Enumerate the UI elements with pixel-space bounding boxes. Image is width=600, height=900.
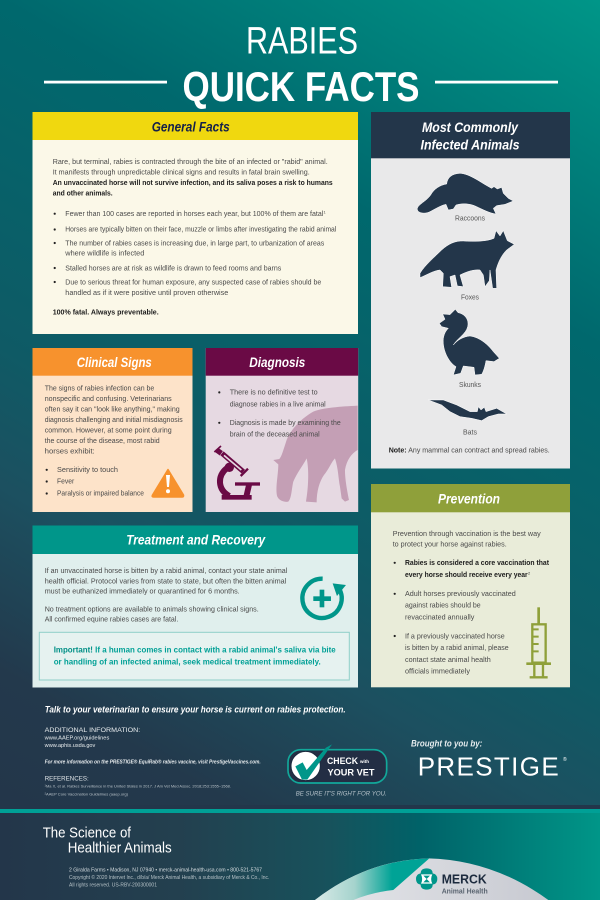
footer band bbox=[0, 805, 600, 900]
text block: additional information: ADDITIONAL INFORMATION: bbox=[45, 727, 140, 734]
list: prevention bullets: If a previously vaccinated horse bbox=[405, 631, 505, 640]
list: general facts bullets: Due to serious threat for human exposure, any suspected case of rabies should be bbox=[65, 277, 321, 286]
panel: most commonly infected animals bbox=[371, 112, 570, 468]
icon: microscope bbox=[214, 446, 260, 500]
list: general facts bullets: Stalled horses are at risk as wildlife is drawn to feed rooms and barns bbox=[65, 263, 281, 272]
label: foxes: Foxes bbox=[461, 293, 479, 302]
callout: important: Important! If a human comes in contact with a rabid animal's saliva via bite bbox=[54, 644, 336, 654]
icon: bat bbox=[428, 400, 507, 421]
list: diagnosis bullets: There is no definitive test to bbox=[230, 388, 318, 397]
list: prevention bullets: Rabies is considered a core vaccination that bbox=[405, 558, 549, 567]
icon: raccoon bbox=[417, 173, 513, 214]
list: prevention bullets: Adult horses previously vaccinated bbox=[405, 589, 516, 598]
heading: most commonly infected animals bbox=[420, 119, 520, 153]
text block: additional information bbox=[44, 727, 261, 765]
panel: diagnosis bbox=[206, 348, 358, 512]
list: clinical signs bullets: Paralysis or impaired balance bbox=[57, 489, 144, 498]
text block: tagline: 100% fatal. Always preventable. bbox=[53, 307, 159, 316]
list: general facts bullets: Horses are typically bitten on their face, muzzle or limbs after investigating the rabid animal bbox=[65, 225, 337, 234]
text block: treatment: health official. Protocol varies from state to state, but often the bitten animal bbox=[45, 576, 287, 585]
text block: clinical signs: often say it can "look like anything," making bbox=[45, 404, 180, 413]
callout: important bbox=[39, 632, 349, 680]
list: general facts bullets: where wildlife is infected bbox=[64, 249, 144, 258]
text block: references bbox=[45, 776, 231, 796]
badge: check with your vet: CHECK bbox=[327, 756, 358, 767]
list: diagnosis bullets: Diagnosis is made by examining the bbox=[230, 418, 341, 427]
list: prevention bullets: every horse should receive every year bbox=[405, 570, 528, 579]
title: QUICK FACTS bbox=[182, 63, 420, 110]
list: general facts bullets: The number of rabies cases is increasing due, in large part, to urbanization of areas bbox=[65, 238, 324, 247]
list: prevention bullets: contact state animal health bbox=[405, 655, 491, 664]
list: prevention bullets bbox=[394, 558, 549, 676]
text block: treatment bbox=[45, 566, 288, 624]
text block: general facts intro: Rare, but terminal, rabies is contracted through the bite of an infected or "rabid" animal. bbox=[53, 157, 328, 166]
text block: additional information: www.aphis.usda.gov bbox=[44, 743, 96, 749]
panel: clinical signs bbox=[32, 348, 192, 512]
text block: clinical signs bbox=[45, 384, 183, 455]
text block: company address: Copyright © 2020 Intervet Inc., d/b/a/ Merck Animal Health, a subsidiary of Merck & Co., Inc. bbox=[69, 874, 269, 881]
list: clinical signs bullets: Fever bbox=[57, 477, 75, 486]
text block: clinical signs: The signs of rabies infection can be bbox=[45, 384, 154, 393]
badge: check with your vet bbox=[288, 744, 387, 797]
text block: references: ¹Ma X, et al. Rabies Surveillance in the United States in 2017. J Am Vet Med Assoc. 2018;253:1555–1568. bbox=[45, 785, 231, 789]
text block: general facts intro: It manifests through unpredictable clinical signs and results in fatal brain swelling. bbox=[53, 168, 310, 176]
logo: merck animal health: MERCK bbox=[442, 872, 487, 887]
text: the science of healthier animals: The Science of bbox=[43, 824, 132, 841]
list: general facts bullets: Fewer than 100 cases are reported in horses each year, but 100% of them are fatal bbox=[65, 209, 324, 218]
list: general facts bullets bbox=[54, 209, 337, 297]
text block: general facts intro: An unvaccinated horse will not survive infection, and its saliva poses a risk to humans bbox=[53, 178, 333, 187]
label: bats: Bats bbox=[463, 428, 477, 437]
text block: company address: All rights reserved. US-RBV-200300001 bbox=[69, 882, 157, 888]
list: prevention bullets: against rabies should be bbox=[405, 601, 481, 610]
logo: merck animal health bbox=[305, 858, 558, 900]
list: prevention bullets: revaccinated annually bbox=[405, 613, 474, 622]
heading: diagnosis: Diagnosis bbox=[249, 354, 305, 370]
text block: clinical signs: nonspecific and confusing. Veterinarians bbox=[45, 394, 172, 403]
text block: company address: 2 Giralda Farms • Madison, NJ 07940 • merck-animal-health-usa.com • 800-521-5767 bbox=[69, 868, 262, 874]
heading: treatment and recovery: Treatment and Recovery bbox=[126, 531, 266, 547]
badge: check with your vet: with bbox=[359, 759, 369, 764]
text block: treatment: All confirmed equine rabies cases are fatal. bbox=[45, 615, 178, 624]
icon: skunk bbox=[439, 309, 499, 375]
text block: clinical signs: diagnosis challenging and initial misdiagnosis bbox=[45, 415, 183, 424]
text block: general facts intro: and other animals. bbox=[53, 188, 113, 198]
logo: merck animal health: Animal Health bbox=[442, 888, 488, 895]
text block: prevention intro: Prevention through vaccination is the best way bbox=[393, 529, 541, 538]
panel: prevention bbox=[371, 484, 570, 687]
logo: prestige: PRESTIGE bbox=[418, 752, 562, 782]
text block: treatment: If an unvaccinated horse is bitten by a rabid animal, contact your state animal bbox=[45, 566, 288, 575]
text: the science of healthier animals bbox=[43, 824, 172, 857]
list: diagnosis bullets: diagnose rabies in a live animal bbox=[230, 399, 326, 408]
icon: warning triangle bbox=[152, 470, 184, 497]
text block: general facts intro bbox=[53, 157, 333, 198]
text block: references: REFERENCES: bbox=[45, 776, 89, 783]
badge: check with your vet: YOUR VET bbox=[328, 768, 375, 779]
illustration: grazing horse bbox=[273, 406, 358, 502]
heading: most commonly infected animals: Infected Animals bbox=[420, 137, 520, 153]
list: diagnosis bullets bbox=[218, 388, 341, 439]
icon: fox bbox=[420, 231, 514, 288]
heading: prevention: Prevention bbox=[438, 490, 500, 506]
text block: clinical signs: the course of the disease, most rabid bbox=[45, 436, 160, 445]
title bbox=[44, 21, 558, 110]
list: clinical signs bullets bbox=[46, 465, 144, 498]
panel: general facts bbox=[32, 112, 358, 334]
panel: treatment and recovery bbox=[32, 526, 358, 688]
list: clinical signs bullets: Sensitivity to touch bbox=[57, 465, 118, 474]
text block: note: Note: Any mammal can contract and spread rabies. bbox=[389, 445, 550, 454]
list: prevention bullets: officials immediately bbox=[405, 667, 470, 676]
list: general facts bullets: handled as if it were positive until proven otherwise bbox=[65, 288, 228, 297]
text block: references: ²AAEP Core Vaccination Guidelines (aaep.org) bbox=[45, 792, 129, 796]
text block: treatment: No treatment options are available to animals showing clinical signs. bbox=[45, 604, 259, 613]
text: brought to you by: Brought to you by: bbox=[411, 739, 482, 749]
text block: clinical signs: horses exhibit: bbox=[45, 446, 95, 455]
badge: check with your vet: BE SURE IT'S RIGHT FOR YOU. bbox=[296, 790, 387, 797]
text block: prevention intro: to protect your horse against rabies. bbox=[393, 539, 507, 548]
icon: syringe bbox=[526, 607, 551, 677]
logo: prestige: ® bbox=[563, 756, 567, 763]
text block: treatment: must be euthanized immediately or quarantined for 6 months. bbox=[45, 587, 240, 596]
text block: additional information: www.AAEP.org/guidelines bbox=[44, 736, 110, 742]
text block: additional information: For more information on the PRESTIGE® EquiRab® rabies vaccine, visit PrestigeVaccines.com. bbox=[45, 758, 261, 765]
label: skunks: Skunks bbox=[459, 380, 481, 389]
list: prevention bullets: 2 bbox=[528, 570, 531, 575]
callout: talk to your veterinarian: Talk to your veterinarian to ensure your horse is current on rabies protection. bbox=[45, 704, 346, 715]
list: general facts bullets: 1 bbox=[324, 210, 326, 214]
text: the science of healthier animals: Healthier Animals bbox=[68, 840, 172, 857]
list: diagnosis bullets: brain of the deceased animal bbox=[230, 430, 320, 439]
icon: recovery plus bbox=[302, 579, 346, 618]
callout: important: or handling of an infected animal, seek medical treatment immediately. bbox=[54, 656, 321, 666]
text block: prevention intro bbox=[393, 529, 541, 548]
heading: clinical signs: Clinical Signs bbox=[77, 354, 152, 370]
title: RABIES bbox=[246, 21, 358, 63]
heading: most commonly infected animals: Most Commonly bbox=[422, 119, 519, 135]
text block: clinical signs: common. However, at some point during bbox=[45, 425, 172, 434]
heading: general facts: General Facts bbox=[152, 118, 230, 134]
text block: company address bbox=[69, 868, 269, 888]
list: prevention bullets: is bitten by a rabid animal, please bbox=[405, 643, 509, 652]
label: raccoons: Raccoons bbox=[455, 214, 485, 223]
